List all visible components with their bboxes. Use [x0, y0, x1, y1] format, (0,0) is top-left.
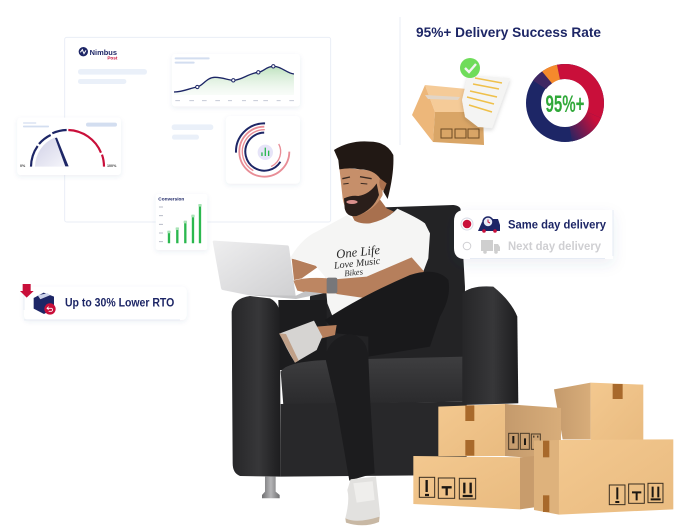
gauge card: 0%: [20, 164, 26, 168]
leg lower: [325, 334, 375, 481]
line chart card: [172, 54, 300, 106]
chair back: [310, 205, 465, 363]
arm: [327, 257, 424, 298]
conversion bar chart card: Conversion: [158, 197, 184, 202]
same-day delivery card: [454, 210, 613, 259]
logo: Nimbus Post: Nimbus: [90, 48, 117, 57]
dashboard panel: [17, 37, 331, 320]
armchair: [232, 205, 518, 498]
heading: 95%+ Delivery Success Rate: [416, 24, 601, 40]
radio: unselected: [463, 242, 471, 250]
icon: grey truck: [481, 240, 500, 254]
neck: [352, 195, 394, 225]
right arm: [462, 286, 518, 405]
man with laptop: [213, 141, 449, 525]
logo: Nimbus Post: Post: [107, 56, 118, 61]
dashboard frame: [65, 37, 331, 222]
icon: fast truck: [478, 217, 500, 233]
radio: selected: [461, 218, 473, 230]
raised shoe: [279, 321, 322, 363]
leg crossed: [325, 272, 449, 357]
delivery success panel: [400, 17, 604, 145]
t-shirt print: Love Music: [333, 256, 381, 272]
gauge card: [17, 118, 121, 175]
box top right: [554, 383, 643, 440]
RTO card: [20, 284, 187, 320]
box bottom right: [534, 439, 673, 515]
icon: parcel with checklist: [412, 58, 510, 145]
icon: red down arrow: [20, 284, 34, 298]
t-shirt print: [331, 243, 383, 279]
t-shirt: [290, 209, 430, 318]
icon: return parcel: [34, 293, 56, 315]
next day label: Next day delivery: [508, 239, 601, 253]
hand: [293, 278, 337, 293]
cardboard boxes: [413, 383, 673, 515]
box top left: [438, 404, 561, 460]
placeholder text lines: [78, 69, 213, 140]
t-shirt print: Bikes: [344, 266, 364, 278]
donut chart: 95%+: [546, 91, 584, 118]
conversion bar chart card: [156, 194, 207, 250]
chair front: [281, 402, 467, 477]
chair leg: [262, 477, 280, 498]
chair inner: [278, 300, 327, 370]
donut chart: [533, 64, 604, 141]
head: [334, 141, 393, 216]
floor shoe: [345, 477, 380, 525]
left arm: [232, 296, 281, 477]
box bottom left: [413, 456, 534, 509]
back arm: [292, 258, 318, 280]
RTO label: Up to 30% Lower RTO: [65, 296, 174, 310]
laptop: [213, 241, 323, 299]
t-shirt print: One Life: [336, 243, 381, 261]
radial chart card: [226, 116, 300, 184]
gauge card: 100%: [107, 164, 117, 168]
same day label: Same day delivery: [508, 218, 606, 232]
logo: Nimbus Post: [79, 47, 118, 61]
chair seat: [281, 357, 465, 405]
ankle: [317, 325, 337, 338]
watch: [327, 278, 337, 293]
